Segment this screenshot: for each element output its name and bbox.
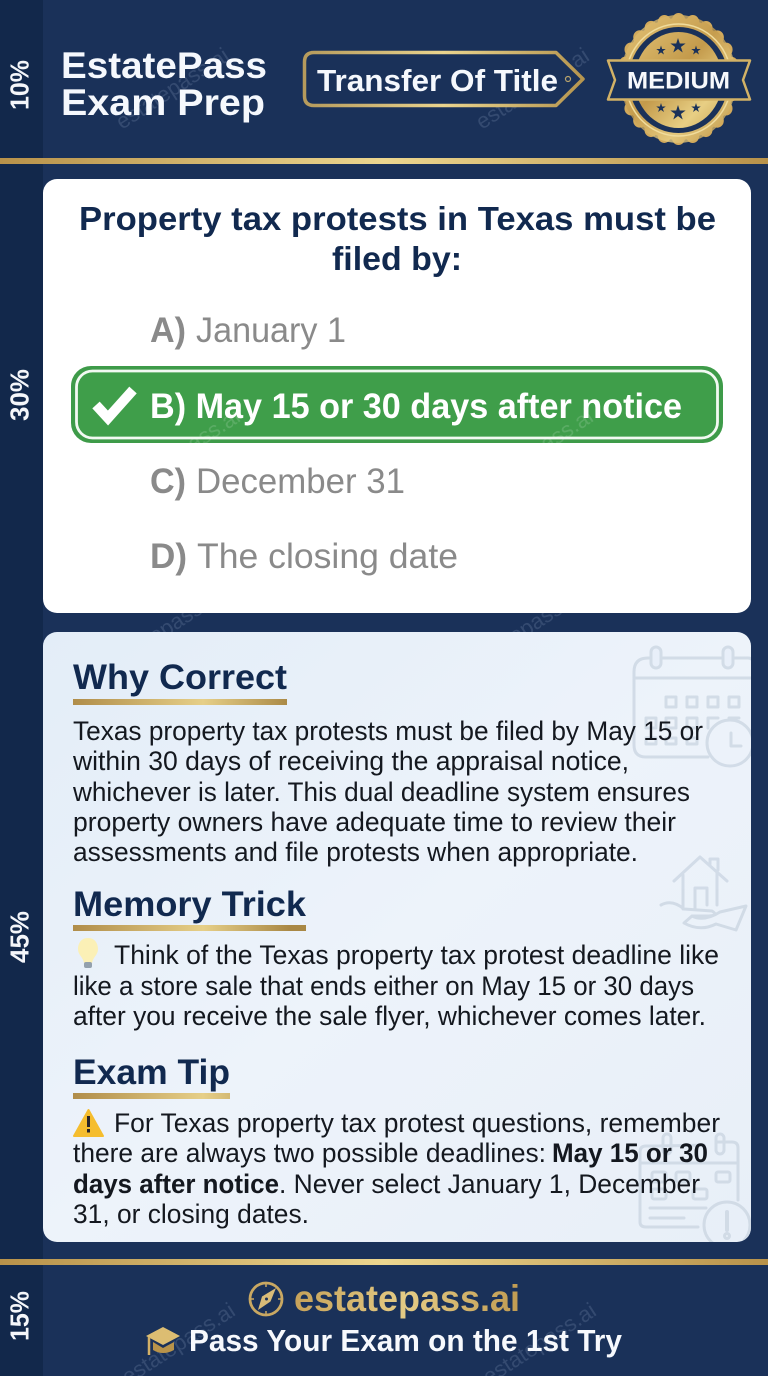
- difficulty badge: MEDIUM: [627, 68, 730, 94]
- heading: why correct: Why Correct: [73, 658, 287, 697]
- icon: house in hand: [661, 857, 746, 930]
- text: exam tip explanation: For Texas property tax protest questions, remember: [114, 1108, 720, 1138]
- option B: correct answer: estatepass.ai: [122, 404, 244, 495]
- option C: C): [150, 462, 186, 501]
- question heading: filed by:: [332, 240, 462, 277]
- difficulty badge: [608, 15, 750, 143]
- panel: question card: [43, 179, 751, 613]
- label: 10%: 10%: [4, 60, 34, 110]
- option A: January 1: [196, 311, 346, 350]
- background watermarks: estatepass.ai: [104, 583, 226, 674]
- text: why correct explanation: assessments and file protests when appropriate.: [73, 837, 638, 867]
- topic tag: Transfer Of Title: [317, 63, 558, 98]
- option D: The closing date: [197, 537, 458, 576]
- option C: December 31: [196, 462, 405, 501]
- header title: Exam Prep: [61, 82, 265, 123]
- text: memory trick explanation: [73, 940, 719, 1031]
- icon: check mark: [96, 390, 133, 418]
- question heading: Property tax protests in Texas must be: [79, 200, 716, 237]
- text: exam tip explanation: there are always two possible deadlines:: [73, 1138, 546, 1168]
- text: memory trick explanation: like a store sale that ends either on May 15 or 30 days: [73, 971, 694, 1001]
- text: exam tip explanation: May 15 or 30: [552, 1138, 708, 1168]
- option B: correct answer: [71, 366, 723, 495]
- text: memory trick explanation: Think of the Texas property tax protest deadline like: [114, 940, 719, 970]
- label: 45%: 45%: [4, 911, 34, 963]
- footer tagline: Pass Your Exam on the 1st Try: [189, 1323, 623, 1358]
- footer divider: bottom gold rule: [0, 1259, 768, 1265]
- text: why correct explanation: [72, 716, 703, 867]
- label: 15%: 15%: [4, 1291, 34, 1341]
- icon: calendar with clock: [634, 647, 754, 766]
- option D: D): [150, 537, 187, 576]
- label: 30%: 30%: [4, 369, 34, 421]
- header divider: top gold rule: [0, 158, 768, 164]
- heading: exam tip: Exam Tip: [73, 1053, 230, 1092]
- icon: calendar with alert: [640, 1134, 750, 1248]
- question heading: [79, 200, 716, 277]
- icon: compass: [250, 1283, 282, 1315]
- header title: EstatePass: [61, 45, 267, 86]
- footer brand: estatepass.ai: [294, 1278, 520, 1319]
- heading: memory trick: Memory Trick: [73, 885, 307, 924]
- text: exam tip explanation: . Never select January 1, December: [279, 1169, 700, 1199]
- text: why correct explanation: within 30 days of receiving the appraisal notice,: [72, 746, 629, 776]
- text: why correct explanation: Texas property tax protests must be filed by May 15 or: [73, 716, 703, 746]
- percentage strip: [0, 0, 43, 1376]
- background watermarks: estatepass.ai: [111, 43, 233, 134]
- icon: graduation cap: [146, 1327, 180, 1355]
- option B: correct answer: estatepass.ai: [475, 404, 597, 495]
- topic tag: [304, 52, 583, 106]
- background watermarks: estatepass.ai: [471, 43, 593, 134]
- background watermarks: estatepass.ai: [464, 583, 586, 674]
- icon: light bulb: [78, 938, 98, 968]
- text: memory trick explanation: after you receive the sale flyer, whichever comes later.: [73, 1001, 706, 1031]
- option A: A): [150, 311, 186, 350]
- background watermarks: [104, 43, 600, 1376]
- text: exam tip explanation: [73, 1108, 720, 1229]
- option B: correct answer: B) May 15 or 30 days after notice: [150, 387, 682, 426]
- text: exam tip explanation: days after notice: [73, 1169, 279, 1199]
- text: exam tip explanation: 31, or closing dates.: [73, 1199, 309, 1229]
- panel: explanation: [43, 632, 754, 1248]
- header title: [61, 45, 267, 123]
- text: why correct explanation: whichever is later. This dual deadline system ensures: [72, 777, 690, 807]
- icon: warning triangle: [74, 1110, 103, 1136]
- text: why correct explanation: property owners have adequate time to review their: [73, 807, 676, 837]
